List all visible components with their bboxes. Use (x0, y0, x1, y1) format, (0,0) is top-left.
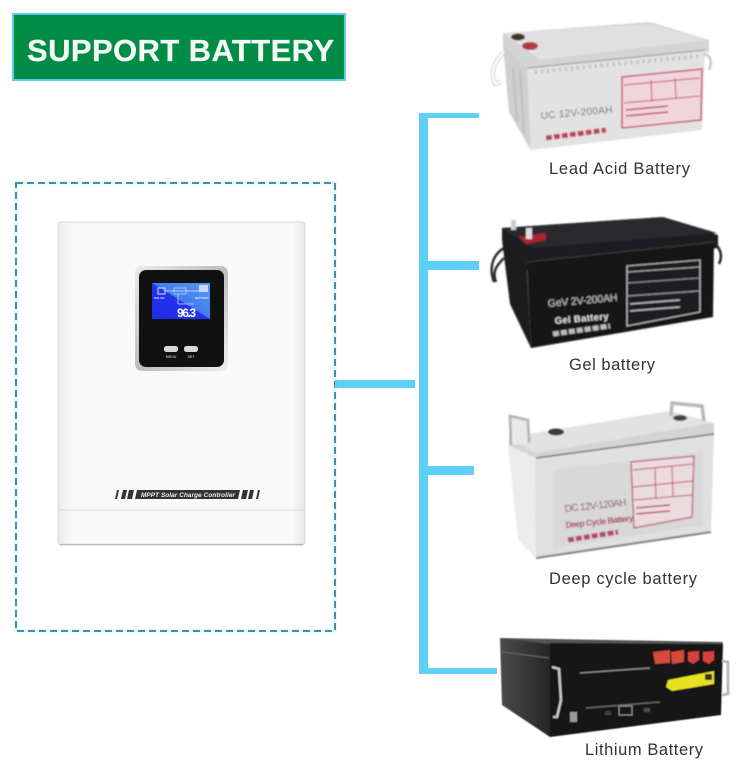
LCD screen (152, 283, 210, 320)
battery: gel: Gel Battery (554, 311, 610, 327)
battery: lithium (500, 638, 728, 737)
title banner: SUPPORT BATTERY (27, 33, 334, 68)
menu and set buttons: SET (188, 355, 195, 359)
battery: deep cycle: DC 12V-120AH (564, 498, 627, 515)
dashed frame around controller (16, 183, 335, 631)
display panel (135, 266, 228, 371)
label: gel battery: Gel battery (569, 356, 656, 374)
menu and set buttons: MENU (166, 355, 177, 359)
menu and set buttons (164, 346, 198, 359)
label: lead acid battery: Lead Acid Battery (549, 160, 691, 178)
charge controller device (58, 222, 305, 545)
battery: gel: GeV 2V-200AH (547, 292, 618, 310)
battery: gel (492, 217, 721, 348)
LCD screen: 96.3 (177, 306, 196, 320)
label: lithium battery: Lithium Battery (585, 741, 704, 759)
product label strip (115, 490, 260, 499)
LCD screen: BATTERY (195, 296, 209, 300)
LCD screen: SOLAR (154, 296, 165, 300)
product label strip: MPPT Solar Charge Controller (141, 492, 236, 499)
battery: deep cycle: Deep Cycle Battery (565, 513, 634, 530)
battery: deep cycle (508, 403, 714, 558)
connector lines (335, 113, 497, 674)
title banner (13, 14, 345, 80)
battery: lead acid: UC 12V-200AH (540, 105, 613, 122)
battery: lead acid (493, 22, 711, 150)
label: deep cycle battery: Deep cycle battery (549, 570, 698, 588)
